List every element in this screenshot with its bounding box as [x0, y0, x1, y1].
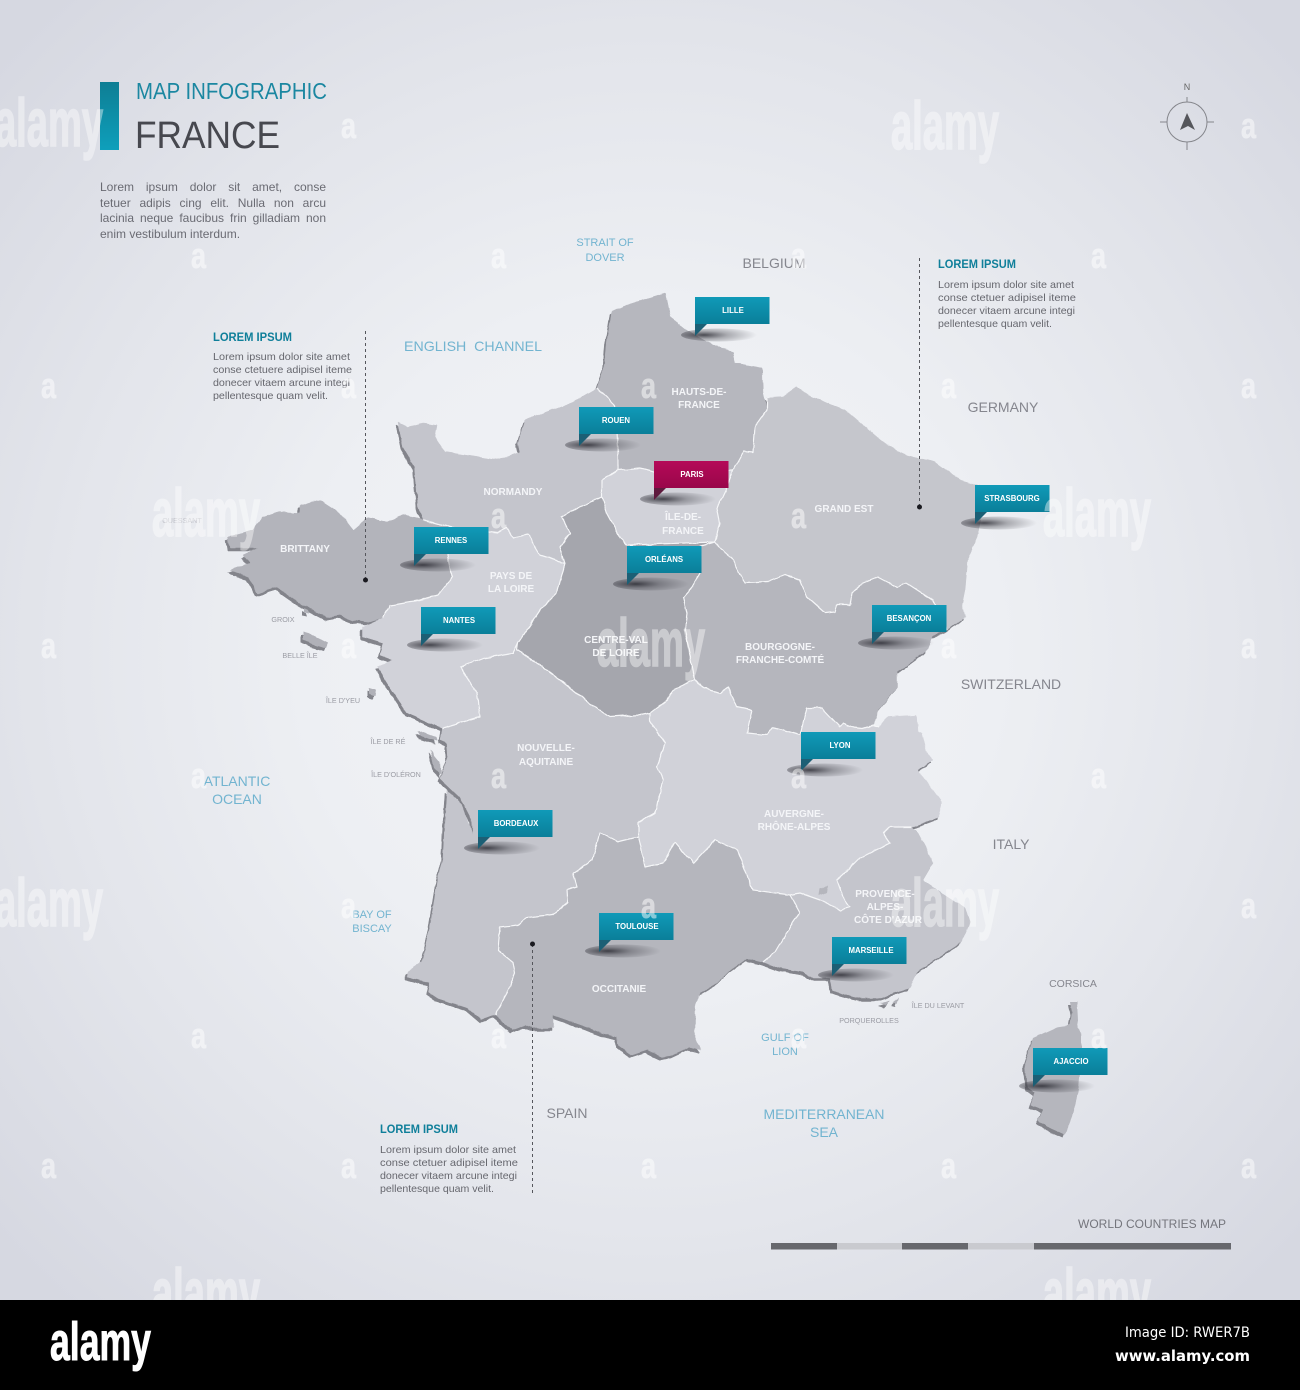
flag: Marseille: [818, 937, 906, 982]
watermark: stock photo marks: a: [341, 105, 357, 146]
region labels: PAYS DE: [490, 571, 532, 582]
region labels: OCCITANIE: [592, 984, 646, 995]
callout: west: Lorem ipsum dolor site amet: [213, 351, 350, 363]
region labels: [280, 387, 923, 995]
neighbouring country labels: ITALY: [993, 836, 1030, 852]
watermark: stock photo marks: a: [941, 625, 957, 666]
title: France: FRANCE: [135, 115, 280, 157]
island labels: [162, 516, 965, 1025]
flag: Rouen: ROUEN: [602, 416, 630, 425]
flag: Strasbourg: [961, 485, 1050, 530]
flag: Bordeaux: [464, 810, 552, 854]
region: Pays de la Loire: [363, 527, 565, 728]
watermark: stock photo marks: a: [1091, 1015, 1107, 1056]
watermark: stock photo marks: a: [941, 1145, 957, 1186]
watermark: stock photo marks: a: [341, 885, 357, 926]
callout: south: LOREM IPSUM: [380, 1124, 458, 1136]
region labels: FRANCE: [662, 526, 704, 537]
neighbouring country labels: [547, 255, 1097, 1121]
region: Bourgogne-Franche-Comte: [683, 542, 947, 735]
flag: Ajaccio: [1019, 1048, 1108, 1092]
callout: north-east: LOREM IPSUM: [938, 259, 1016, 271]
watermark: stock photo marks: a: [641, 365, 657, 406]
watermark: stock photo marks: a: [791, 495, 807, 536]
island labels: BELLE ÎLE: [282, 651, 318, 660]
flag: Lille: LILLE: [722, 306, 744, 315]
region labels: FRANCE: [678, 400, 720, 411]
footer logo: alamy: [50, 1312, 151, 1372]
region: Ile-de-France: [602, 468, 733, 545]
callout: south: conse ctetuer adipisel iteme: [380, 1157, 518, 1169]
region borders: [383, 388, 947, 1015]
watermark: stock photo marks: a: [791, 755, 807, 796]
watermark: stock photo marks: a: [41, 365, 57, 406]
callout: west: LOREM IPSUM: [213, 332, 292, 344]
scale bar: [771, 1217, 1231, 1250]
region labels: ÎLE-DE-: [664, 510, 701, 523]
watermark: stock photo marks: a: [791, 1015, 807, 1056]
watermark: stock photo marks: alamy: [0, 865, 103, 941]
region labels: AUVERGNE-: [764, 809, 824, 820]
flag: Lyon: LYON: [830, 741, 851, 750]
watermark: stock photo marks: a: [41, 625, 57, 666]
region labels: LA LOIRE: [488, 584, 534, 595]
watermark: stock photo marks: a: [491, 235, 507, 276]
sea labels: DOVER: [585, 252, 625, 264]
watermark: stock photo marks: alamy: [152, 1255, 260, 1331]
footer url: www.alamy.com: [1115, 1347, 1250, 1365]
watermark: stock photo marks: a: [191, 235, 207, 276]
kicker: map infographic: MAP INFOGRAPHIC: [136, 78, 327, 104]
island labels: ÎLE D'OLÉRON: [370, 770, 421, 779]
callout: north-east: Lorem ipsum dolor site amet: [938, 279, 1074, 291]
flag: Besancon: BESANÇON: [887, 614, 932, 623]
region labels: BOURGOGNE-: [745, 642, 815, 653]
watermark: stock photo marks: a: [941, 365, 957, 406]
flag: Paris: PARIS: [680, 470, 704, 479]
region labels: AQUITAINE: [519, 757, 573, 768]
callout: south: donecer vitaem arcune integi: [380, 1170, 517, 1182]
watermark: stock photo marks: alamy: [891, 865, 999, 941]
sea labels: STRAIT OF: [576, 237, 634, 249]
sea labels: BAY OF: [352, 909, 392, 921]
intro paragraph: lacinia neque faucibus frin gilladiam non: [100, 211, 326, 225]
watermark: stock photo marks: a: [191, 1015, 207, 1056]
sea labels: LION: [772, 1046, 798, 1058]
region labels: GRAND EST: [815, 504, 873, 515]
region labels: CÔTE D'AZUR: [854, 913, 923, 926]
watermark: stock photo marks: a: [341, 1145, 357, 1186]
map land and borders: [228, 293, 1082, 1135]
callout: south: pellentesque quam velit.: [380, 1183, 494, 1195]
icon: compass: [1160, 82, 1214, 150]
region labels: PROVENCE-: [855, 889, 915, 900]
footer image id: Image ID: RWER7B: [1125, 1325, 1250, 1341]
region: Grand Est: [715, 387, 985, 630]
watermark: stock photo marks: a: [1241, 105, 1257, 146]
sea labels: GULF OF: [761, 1032, 809, 1044]
neighbouring country labels: SPAIN: [547, 1105, 587, 1121]
region: Provence-Alpes-Cote d'Azur: [763, 827, 970, 998]
watermark: stock photo marks: a: [1241, 1145, 1257, 1186]
watermark: stock photo marks: alamy: [597, 605, 705, 681]
icon: compass: N: [1184, 82, 1190, 92]
callout: south: Lorem ipsum dolor site amet: [380, 1144, 516, 1156]
sea labels: BISCAY: [352, 923, 392, 935]
sea labels: OCEAN: [212, 791, 262, 807]
flag: Toulouse: [585, 913, 674, 958]
region labels: FRANCHE-COMTÉ: [736, 653, 824, 666]
scale bar: WORLD COUNTRIES MAP: [1078, 1217, 1226, 1231]
intro paragraph: [100, 180, 326, 241]
neighbouring country labels: BELGIUM: [742, 255, 806, 271]
flag: Paris: [640, 461, 728, 506]
watermark: stock photo marks: a: [191, 755, 207, 796]
region: Brittany: [228, 500, 452, 622]
callout: north-east: conse ctetuer adipisel iteme: [938, 292, 1076, 304]
watermark: stock photo marks: a: [491, 495, 507, 536]
callout: north-east: pellentesque quam velit.: [938, 318, 1052, 330]
watermark: stock photo marks: a: [1091, 755, 1107, 796]
region labels: RHÔNE-ALPES: [758, 820, 831, 833]
callout: west: donecer vitaem arcune integi: [213, 377, 350, 389]
flag: Marseille: MARSEILLE: [848, 946, 894, 955]
region labels: ALPES-: [867, 902, 903, 913]
watermark: stock photo marks: a: [341, 365, 357, 406]
flag: Lyon: [787, 732, 876, 776]
region labels: CENTRE-VAL: [584, 635, 648, 646]
flag: Bordeaux: BORDEAUX: [494, 819, 539, 828]
watermark: stock photo marks: a: [1091, 235, 1107, 276]
island labels: ÎLE D'YEU: [325, 696, 360, 705]
callout: west: conse ctetuere adipisel iteme: [213, 364, 352, 376]
watermark: stock photo marks: a: [491, 755, 507, 796]
sea labels: ATLANTIC: [204, 773, 270, 789]
flag: Toulouse: TOULOUSE: [615, 922, 659, 931]
flag: Orleans: [613, 546, 702, 590]
watermark: stock photo marks: alamy: [152, 475, 260, 551]
accent bar: [100, 82, 119, 150]
footer bar: [0, 1300, 1300, 1390]
flag: Besancon: [858, 605, 946, 650]
region: Nouvelle-Aquitaine: [407, 643, 665, 1020]
intro paragraph: enim vestibulum interdum.: [100, 227, 240, 241]
intro paragraph: tetuer adipis cing elit. Nulla non arcu: [100, 196, 326, 210]
region: Normandy: [398, 388, 618, 563]
watermark: stock photo marks: alamy: [0, 85, 103, 161]
callout: north-east: [917, 258, 1076, 510]
island labels: OUESSANT: [162, 516, 202, 525]
island labels: ÎLE DE RÉ: [370, 737, 406, 746]
flag: Rennes: RENNES: [435, 536, 467, 545]
region labels: NOUVELLE-: [517, 743, 575, 754]
watermark: stock photo marks: a: [791, 235, 807, 276]
islands: [303, 608, 899, 1006]
watermark: stock photo marks: alamy: [891, 88, 999, 164]
island labels: PORQUEROLLES: [839, 1016, 899, 1025]
map: France regions: [228, 293, 1082, 1135]
callout: south: [380, 942, 535, 1195]
region: Corsica: [1025, 1002, 1082, 1135]
watermark: stock photo marks: a: [41, 1145, 57, 1186]
callout: west: pellentesque quam velit.: [213, 390, 328, 402]
watermark: stock photo marks: a: [491, 1015, 507, 1056]
neighbouring country labels: CORSICA: [1049, 978, 1097, 990]
intro paragraph: Lorem ipsum dolor sit amet, conse: [100, 180, 326, 194]
watermark: stock photo marks: alamy: [1043, 475, 1151, 551]
region: Auvergne-Rhone-Alpes: [638, 680, 942, 910]
region: Hauts-de-France: [597, 293, 767, 472]
island labels: ÎLE DU LEVANT: [911, 1001, 965, 1010]
watermark: stock photo marks: a: [641, 1145, 657, 1186]
callout: west: [213, 331, 368, 582]
title block: [135, 78, 327, 157]
island labels: GROIX: [271, 615, 295, 624]
sea labels: SEA: [810, 1124, 839, 1140]
flag: Rouen: [565, 407, 654, 452]
callout: north-east: donecer vitaem arcune integi: [938, 305, 1075, 317]
watermark: stock photo marks: alamy: [1043, 1255, 1151, 1331]
sea labels: [204, 237, 884, 1140]
flag: Nantes: [407, 607, 496, 652]
neighbouring country labels: SWITZERLAND: [961, 676, 1061, 692]
watermark: stock photo marks: a: [1241, 625, 1257, 666]
flag: Rennes: [400, 527, 488, 572]
map land with extruded edge: [228, 293, 1082, 1135]
watermark: stock photo marks: a: [1241, 885, 1257, 926]
region labels: DE LOIRE: [592, 648, 640, 659]
sea labels: ENGLISH CHANNEL: [404, 338, 542, 354]
watermark: stock photo marks: a: [1241, 365, 1257, 406]
flag: Strasbourg: STRASBOURG: [984, 494, 1040, 503]
flag: Nantes: NANTES: [443, 616, 475, 625]
region labels: NORMANDY: [484, 487, 543, 498]
region labels: HAUTS-DE-: [672, 387, 726, 398]
region: Occitanie: [495, 833, 800, 1057]
region: Centre-Val de Loire: [517, 497, 715, 717]
watermark: stock photo marks: a: [641, 885, 657, 926]
flag: Lille: [681, 297, 770, 342]
neighbouring country labels: GERMANY: [968, 399, 1039, 415]
sea labels: MEDITERRANEAN: [764, 1106, 884, 1122]
flag: Orleans: ORLÉANS: [645, 555, 683, 564]
region labels: BRITTANY: [280, 544, 330, 555]
watermark: stock photo marks: a: [341, 625, 357, 666]
flag: Ajaccio: AJACCIO: [1053, 1057, 1089, 1066]
